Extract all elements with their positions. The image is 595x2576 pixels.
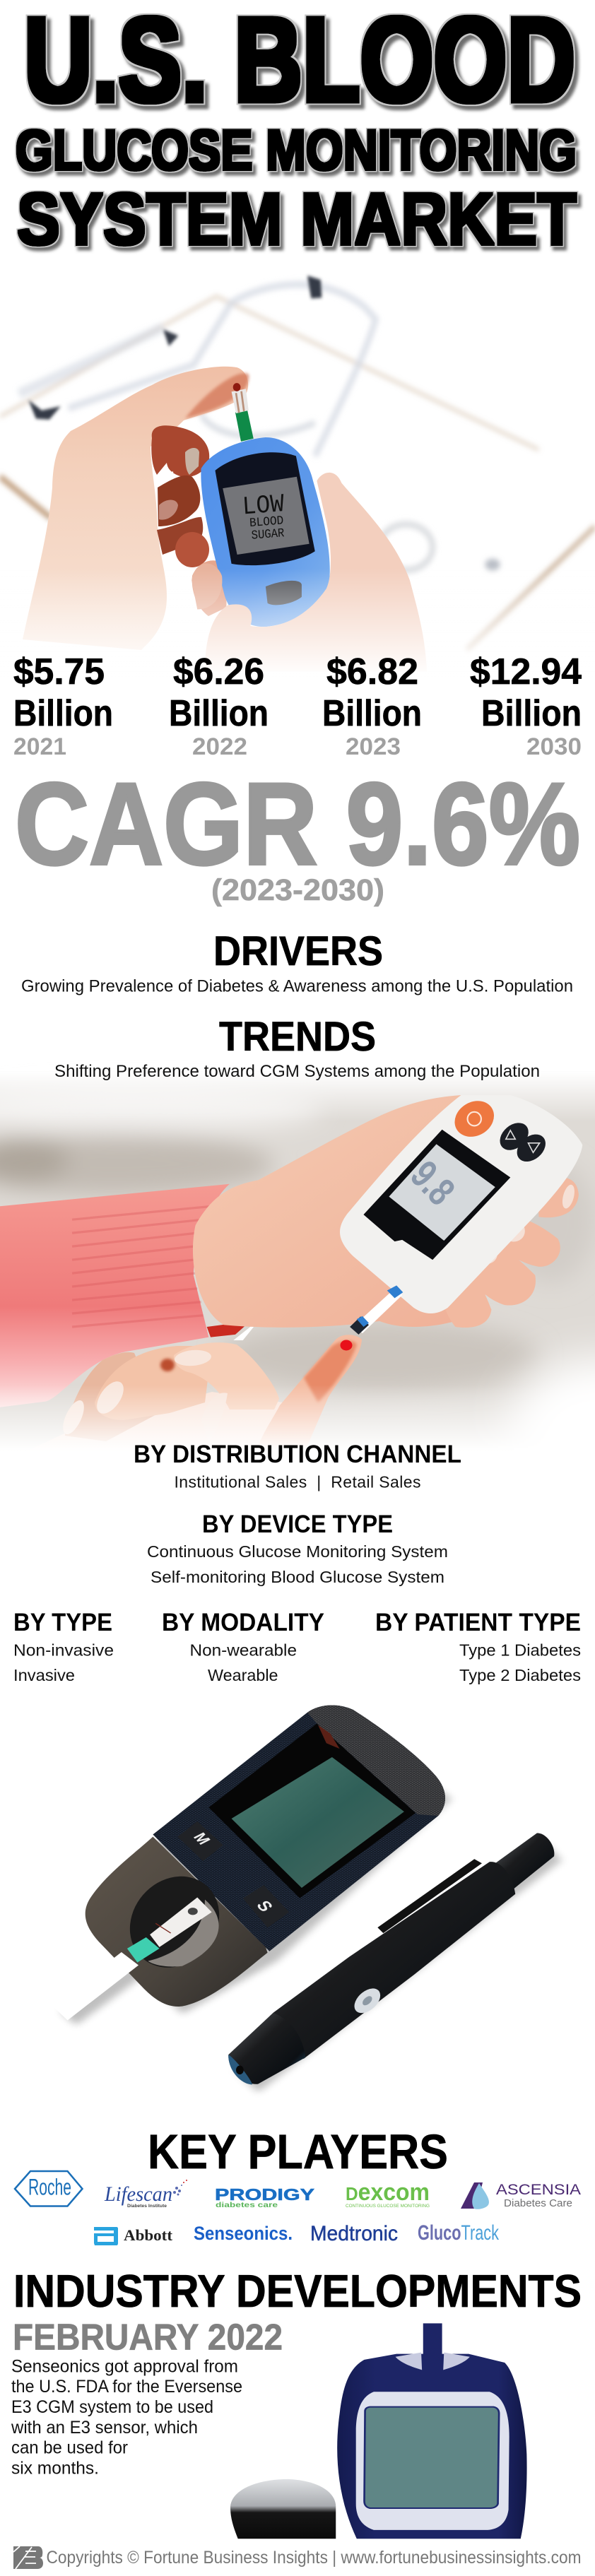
meter screen <box>365 2407 499 2508</box>
by patient type <box>375 1608 581 1684</box>
test strip <box>423 2323 442 2373</box>
by device type <box>147 1510 448 1586</box>
logo: Prodigy: PRODIGY <box>215 2185 314 2204</box>
by modality: Non-wearable <box>189 1641 297 1659</box>
key players heading: KEY PLAYERS <box>148 2125 448 2179</box>
pen button <box>349 1985 386 2016</box>
palm base <box>18 1392 304 1455</box>
development description: E3 CGM system to be used <box>11 2397 213 2417</box>
by modality <box>162 1608 324 1684</box>
main hand <box>193 1095 531 1328</box>
hero image: hands testing with blue glucose meter <box>0 276 595 689</box>
S button: S <box>252 1898 277 1914</box>
logo: Prodigy: diabetes care <box>216 2201 278 2209</box>
meter port <box>396 2353 470 2370</box>
clipboard and stethoscope <box>0 276 595 650</box>
logo: Dexcom: Dexcom <box>346 2179 430 2206</box>
logo: Abbott <box>94 2226 173 2245</box>
2030 value: 2030 <box>526 733 582 760</box>
logo: Lifescan <box>104 2180 187 2209</box>
meter body <box>337 2354 527 2539</box>
development description: can be used for <box>11 2438 128 2457</box>
2022 value: 2022 <box>192 733 247 760</box>
2023 value <box>322 651 422 760</box>
image: navy glucose meter with cap <box>230 2323 527 2539</box>
meter mesh body <box>153 1705 445 1951</box>
by device type: BY DEVICE TYPE <box>202 1510 393 1538</box>
logo: Ascensia: ASCENSIA <box>496 2181 582 2198</box>
2021 value: $5.75 <box>13 651 105 692</box>
development description: the U.S. FDA for the Eversense <box>11 2377 242 2397</box>
2023 value: $6.82 <box>326 651 418 692</box>
meter readout <box>242 490 285 543</box>
2023 value: Billion <box>322 693 422 734</box>
by patient type: BY PATIENT TYPE <box>375 1608 581 1636</box>
by patient type: Type 2 Diabetes <box>459 1666 581 1684</box>
meter screen <box>223 477 310 555</box>
by device type: Self-monitoring Blood Glucose System <box>151 1568 444 1586</box>
meter lcd <box>389 1144 495 1241</box>
blurred background <box>0 1071 595 1454</box>
2022 value <box>169 651 269 760</box>
lower nails <box>59 1349 228 1441</box>
2022 value: Billion <box>169 693 269 734</box>
curled finger <box>174 1342 279 1410</box>
meter button <box>266 581 302 605</box>
logo: Roche <box>15 2171 82 2206</box>
by modality: Wearable <box>208 1666 278 1684</box>
logo: Prodigy <box>215 2185 314 2209</box>
by modality: BY MODALITY <box>162 1608 324 1636</box>
2021 value: Billion <box>13 693 113 734</box>
by type: Non-invasive <box>13 1641 114 1659</box>
2030 value <box>470 651 582 760</box>
title <box>16 0 577 261</box>
silver bezel <box>356 2392 509 2530</box>
M button <box>177 1821 223 1861</box>
by type: BY TYPE <box>13 1608 112 1636</box>
drivers <box>21 928 573 996</box>
meter readout: LOW <box>242 490 285 522</box>
test strip <box>350 1285 403 1335</box>
meter lcd <box>232 1757 404 1888</box>
logo: Lifescan: Lifescan <box>104 2182 172 2206</box>
by type <box>13 1608 114 1684</box>
back finger <box>65 1352 159 1441</box>
drivers: DRIVERS <box>213 928 383 974</box>
trends <box>54 1014 540 1081</box>
2030 value: $12.94 <box>470 651 582 692</box>
logo: Roche: Roche <box>28 2175 71 2200</box>
market size figures <box>13 651 582 760</box>
middle finger <box>95 1346 212 1420</box>
nails <box>442 1183 577 1282</box>
drop shadow <box>61 1713 562 2092</box>
image: pink sleeve hand using white meter <box>0 1071 595 1512</box>
test strip <box>232 383 254 442</box>
logo: Dexcom: CONTINUOUS GLUCOSE MONITORING <box>346 2204 430 2209</box>
meter face <box>215 452 315 565</box>
by distribution channel: BY DISTRIBUTION CHANNEL <box>134 1440 461 1468</box>
by device type: Continuous Glucose Monitoring System <box>147 1542 448 1561</box>
white meter <box>340 1094 582 1313</box>
blue meter <box>192 383 427 671</box>
development description: with an E3 sensor, which <box>11 2418 198 2438</box>
index finger <box>254 1335 362 1455</box>
meter readout: BLOOD <box>249 514 284 531</box>
logo: GlucoTrack: GlucoTrack <box>418 2221 500 2245</box>
development description: six months. <box>11 2459 99 2478</box>
by distribution channel <box>134 1440 461 1491</box>
logo: Abbott: Abbott <box>124 2226 173 2244</box>
sleeve <box>0 1184 260 1407</box>
2021 value <box>13 651 113 760</box>
logo: Lifescan: Diabetes Institute <box>127 2204 167 2209</box>
red reflection <box>318 1725 340 1749</box>
power button <box>448 1094 500 1144</box>
date heading: FEBRUARY 2022 <box>13 2317 283 2358</box>
2030 value: Billion <box>481 693 582 734</box>
strip port <box>119 1870 230 1974</box>
image fade <box>0 1357 595 1512</box>
by patient type: Type 1 Diabetes <box>459 1641 581 1659</box>
footer logo <box>13 2546 43 2569</box>
right hand <box>205 473 427 671</box>
curled fingers <box>151 425 227 616</box>
2021 value: 2021 <box>13 733 66 760</box>
M button: M <box>189 1830 214 1847</box>
footer <box>13 2546 581 2569</box>
left hand <box>23 367 249 650</box>
lower hand <box>18 1335 362 1455</box>
key player logos <box>15 2171 582 2245</box>
meter readout: SUGAR <box>251 527 285 543</box>
arrow buttons <box>495 1117 550 1167</box>
lancing pen <box>228 1833 554 2084</box>
drivers: Growing Prevalence of Diabetes & Awareness among the U.S. Population <box>21 976 573 996</box>
CAGR period: (2023-2030) <box>211 873 384 907</box>
meter bezel <box>363 1130 510 1260</box>
meter upper shading <box>307 1705 445 1816</box>
development description <box>11 2357 242 2478</box>
blood drop <box>341 1340 352 1351</box>
logo: Ascensia: Diabetes Care <box>504 2197 572 2209</box>
image fade <box>0 569 595 689</box>
logo: Senseonics: Senseonics. <box>194 2223 293 2244</box>
trends: Shifting Preference toward CGM Systems among the Population <box>54 1062 540 1081</box>
index finger shading <box>185 373 249 418</box>
logo: Medtronic: Medtronic <box>310 2222 398 2245</box>
2023 value: 2023 <box>346 733 401 760</box>
trends: TRENDS <box>219 1014 376 1060</box>
by type: Invasive <box>13 1666 75 1684</box>
image: black glucose meter and lancing pen <box>52 1705 562 2092</box>
logo: Ascensia <box>461 2181 582 2209</box>
clips <box>28 276 322 420</box>
meter base <box>86 1837 268 2007</box>
2022 value: $6.26 <box>173 651 264 692</box>
round cap <box>230 2479 336 2539</box>
development description: Senseonics got approval from <box>11 2357 238 2377</box>
test strip <box>52 1897 212 2020</box>
meter digits: 9.8 <box>402 1153 463 1214</box>
meter bezel <box>208 1724 416 1898</box>
by distribution channel: Institutional Sales | Retail Sales <box>174 1472 421 1491</box>
S button <box>243 1885 289 1927</box>
hand fingers <box>438 1178 579 1328</box>
